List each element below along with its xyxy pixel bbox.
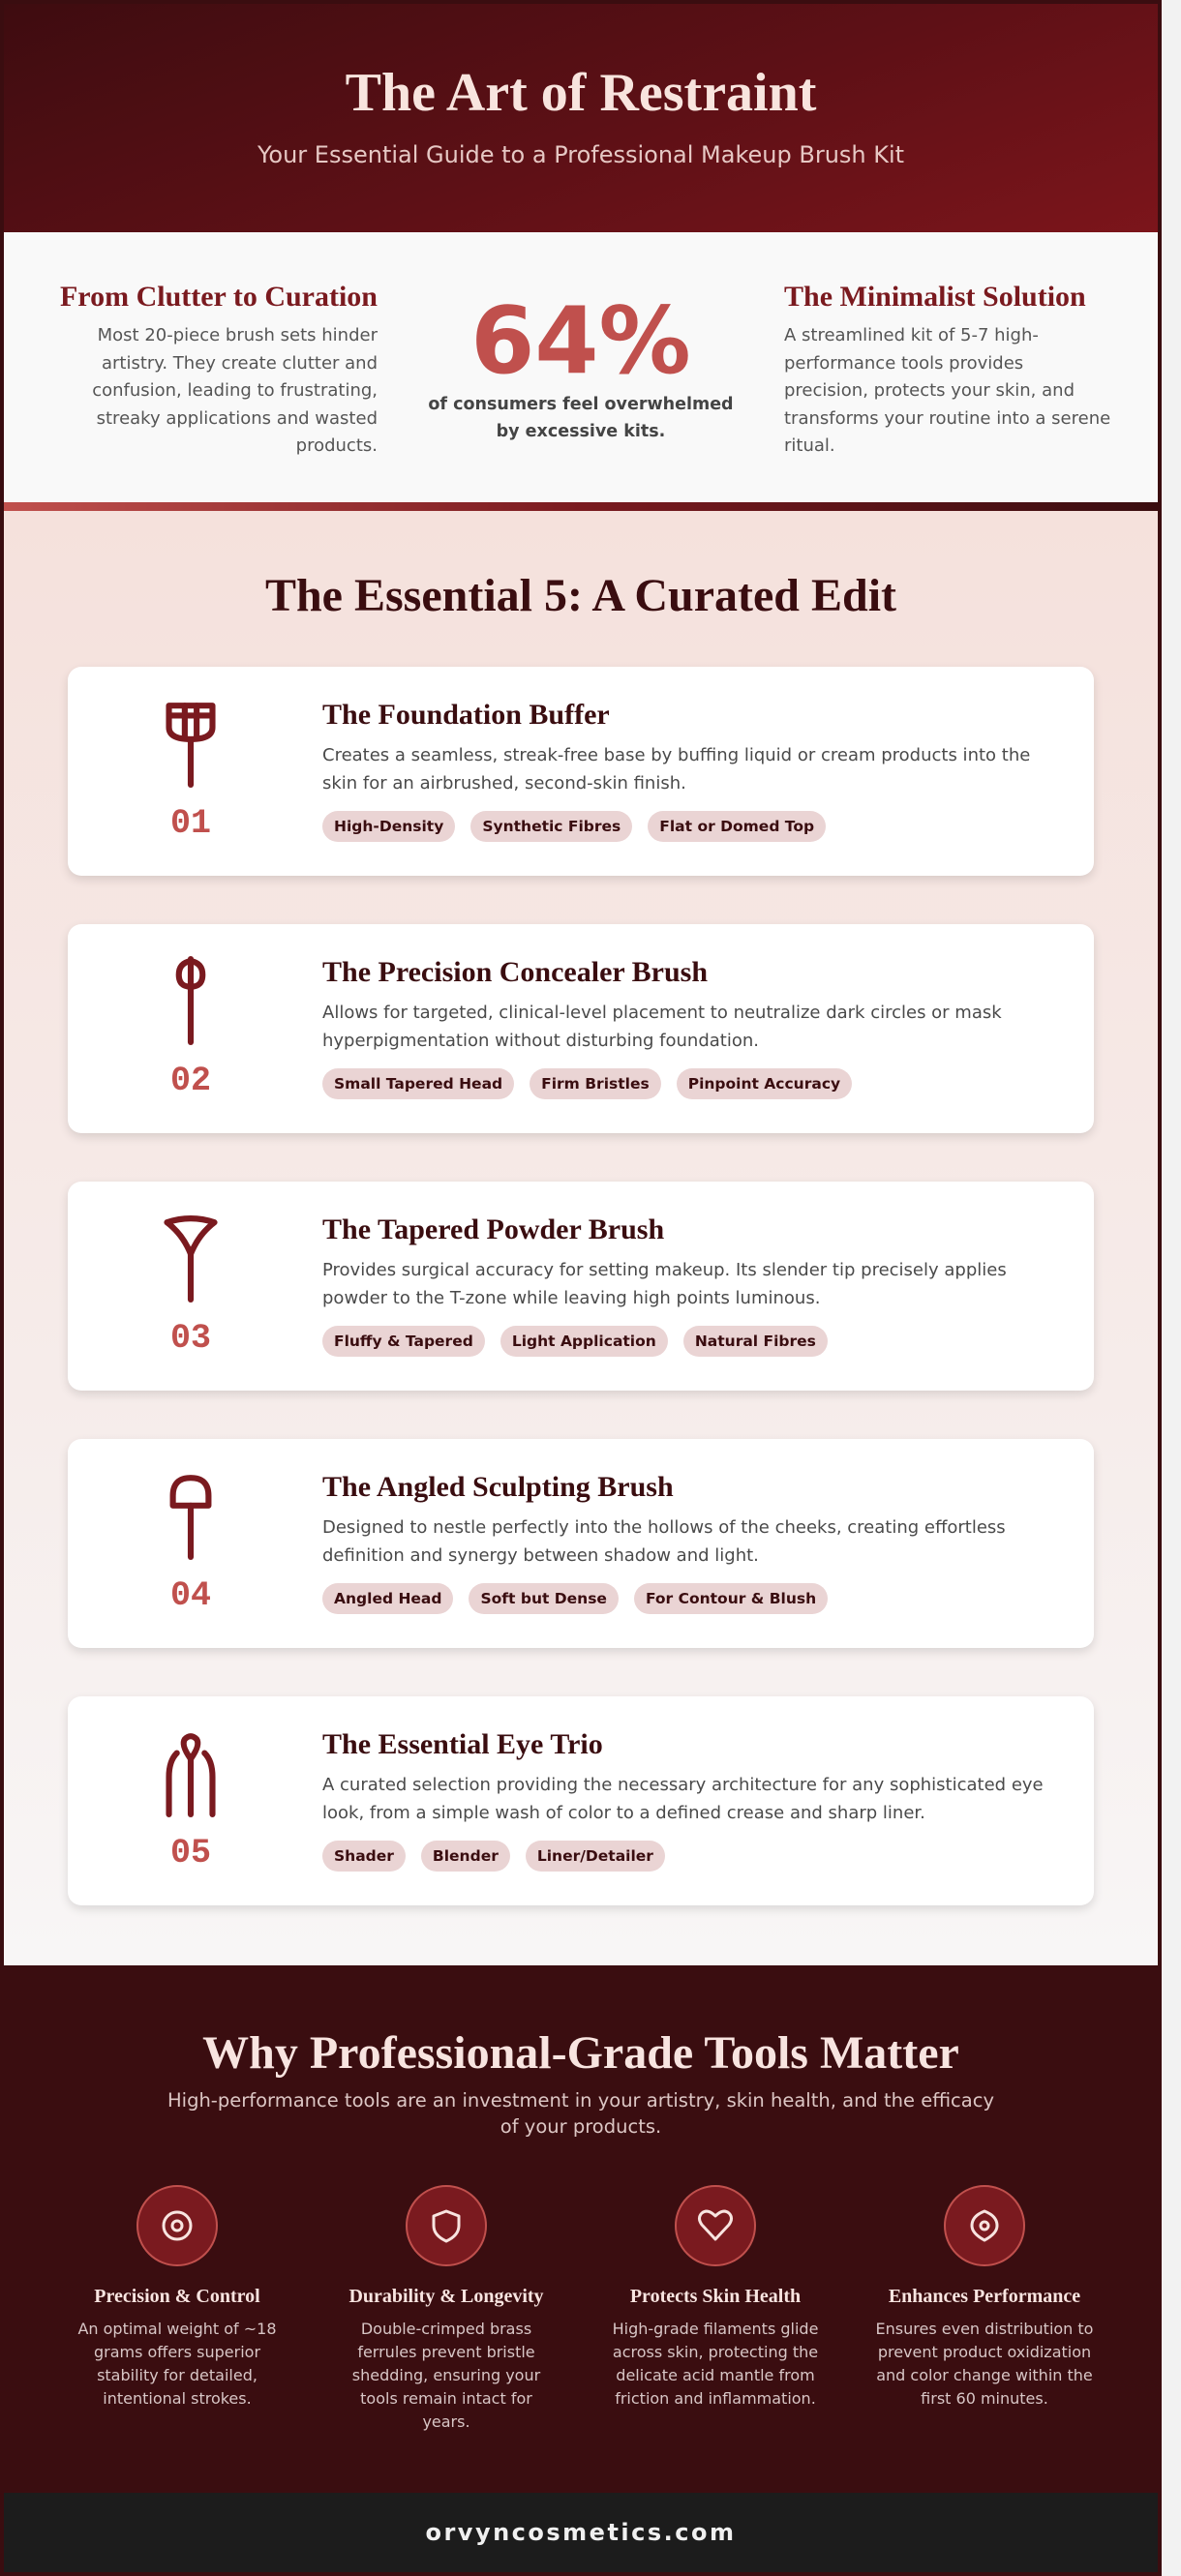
card 3: Fluffy & Tapered <box>334 1333 473 1350</box>
title: The Art of Restraint <box>346 63 816 123</box>
icon: target <box>136 2185 218 2266</box>
benefit: skin health: High-grade filaments glide across skin, protecting the delicate acid mantle from friction and inflammation. <box>613 2320 818 2408</box>
card 3: Light Application <box>512 1333 656 1350</box>
benefit: durability: ferrules prevent bristle <box>357 2343 535 2361</box>
icon: drop target <box>944 2185 1025 2266</box>
icon: foundation buffer <box>166 703 216 788</box>
card 1: 01 <box>170 804 211 843</box>
benefit: precision: An optimal weight of ~18 grams offers superior stability for detailed, intentional strokes. <box>77 2320 277 2408</box>
benefit: durability: Durability & Longevity <box>348 2286 544 2307</box>
card 1 <box>68 667 1094 876</box>
text block: minimalist solution: ritual. <box>784 435 835 456</box>
card 5: The Essential Eye Trio <box>322 1728 603 1760</box>
card 5: Liner/Detailer <box>537 1847 653 1865</box>
header <box>4 4 1158 232</box>
footer: orvyncosmetics.com <box>425 2519 737 2546</box>
text block: minimalist solution <box>784 281 1110 456</box>
stat: 64%: 64% <box>470 288 691 395</box>
text block: from clutter: Most 20-piece brush sets hinder artistry. They create clutter and confusion, leading to frustrating, streaky applications and wasted products. <box>92 325 378 456</box>
heading: Why Professional-Grade Tools Matter <box>202 2027 959 2079</box>
benefit: skin health <box>613 2185 818 2408</box>
card 2: 02 <box>170 1062 211 1100</box>
icon: concealer brush <box>176 956 205 1045</box>
icon: angled sculpting brush <box>170 1475 211 1560</box>
text block: minimalist solution: precision, protects your skin, and <box>784 380 1075 401</box>
card 2: Firm Bristles <box>541 1075 650 1093</box>
stat: 64%: of consumers feel overwhelmed <box>428 395 734 414</box>
subtitle: Your Essential Guide to a Professional Makeup Brush Kit <box>257 141 904 168</box>
card 4: 04 <box>170 1576 211 1615</box>
icon: heart <box>675 2185 756 2266</box>
card 2: Allows for targeted, clinical-level placement to neutralize dark circles or mask hyperpigmentation without disturbing foundation. <box>322 1003 1002 1051</box>
benefit: precision <box>77 2185 277 2408</box>
benefit: performance <box>876 2185 1093 2408</box>
icon: shield <box>406 2185 487 2266</box>
panel: why professional tools <box>4 1965 1158 2493</box>
text block: minimalist solution: performance tools provides <box>784 352 1023 374</box>
card 2: Small Tapered Head <box>334 1075 502 1093</box>
card 3: Provides surgical accuracy for setting makeup. Its slender tip precisely applies powder to the T-zone while leaving high points luminous. <box>322 1260 1007 1308</box>
benefit: durability: years. <box>422 2412 470 2431</box>
card 1: Flat or Domed Top <box>659 818 814 835</box>
benefit: durability <box>348 2185 544 2431</box>
card 2 <box>68 924 1094 1133</box>
card 5 <box>68 1696 1094 1905</box>
icon: tapered powder brush <box>164 1215 218 1303</box>
benefit: precision: Precision & Control <box>94 2286 260 2307</box>
card 5: 05 <box>170 1834 211 1872</box>
card 4: Angled Head <box>334 1590 441 1607</box>
benefit: durability: tools remain intact for <box>360 2389 532 2408</box>
text block: minimalist solution: The Minimalist Solution <box>784 281 1086 313</box>
text block: from clutter <box>60 281 378 456</box>
card 5: Shader <box>334 1847 394 1865</box>
icon: eye trio <box>166 1733 216 1817</box>
stat: 64% <box>428 288 734 441</box>
subtitle: High-performance tools are an investment in your artistry, skin health, and the efficacy of your products. <box>167 2089 994 2138</box>
card 4: Soft but Dense <box>480 1590 607 1607</box>
card 1: High-Density <box>334 818 443 835</box>
card 4: For Contour & Blush <box>646 1590 816 1607</box>
panel: intro <box>4 232 1158 502</box>
text block: from clutter: From Clutter to Curation <box>60 281 378 313</box>
card 3: 03 <box>170 1319 211 1358</box>
card 3: The Tapered Powder Brush <box>322 1213 664 1245</box>
card 3 <box>68 1182 1094 1391</box>
text block: minimalist solution: transforms your routine into a serene <box>784 408 1110 428</box>
benefit: performance: Ensures even distribution to prevent product oxidization and color change within the first 60 minutes. <box>876 2320 1093 2408</box>
heading: The Essential 5: A Curated Edit <box>265 570 896 621</box>
footer <box>4 2493 1158 2572</box>
benefit: performance: Enhances Performance <box>889 2286 1080 2307</box>
card 2: Pinpoint Accuracy <box>688 1075 840 1093</box>
benefit: skin health: Protects Skin Health <box>630 2286 801 2307</box>
panel: essential 5 <box>4 511 1158 1965</box>
benefit: durability: shedding, ensuring your <box>352 2366 540 2384</box>
card 2: The Precision Concealer Brush <box>322 956 708 988</box>
card 3: Natural Fibres <box>695 1333 816 1350</box>
card 4: Designed to nestle perfectly into the hollows of the cheeks, creating effortless definition and synergy between shadow and light. <box>322 1517 1006 1566</box>
card 1: Synthetic Fibres <box>482 818 621 835</box>
card 1: The Foundation Buffer <box>322 699 610 731</box>
card 1: Creates a seamless, streak-free base by buffing liquid or cream products into the skin for an airbrushed, second-skin finish. <box>322 745 1030 794</box>
card 5: A curated selection providing the necessary architecture for any sophisticated eye look, from a simple wash of color to a defined crease and sharp liner. <box>322 1775 1044 1823</box>
stat: 64%: by excessive kits. <box>497 422 665 441</box>
card 5: Blender <box>433 1847 499 1865</box>
benefit: durability: Double-crimped brass <box>361 2320 531 2338</box>
card 4 <box>68 1439 1094 1648</box>
text block: minimalist solution: A streamlined kit of 5-7 high- <box>784 325 1039 345</box>
card 4: The Angled Sculpting Brush <box>322 1471 674 1503</box>
